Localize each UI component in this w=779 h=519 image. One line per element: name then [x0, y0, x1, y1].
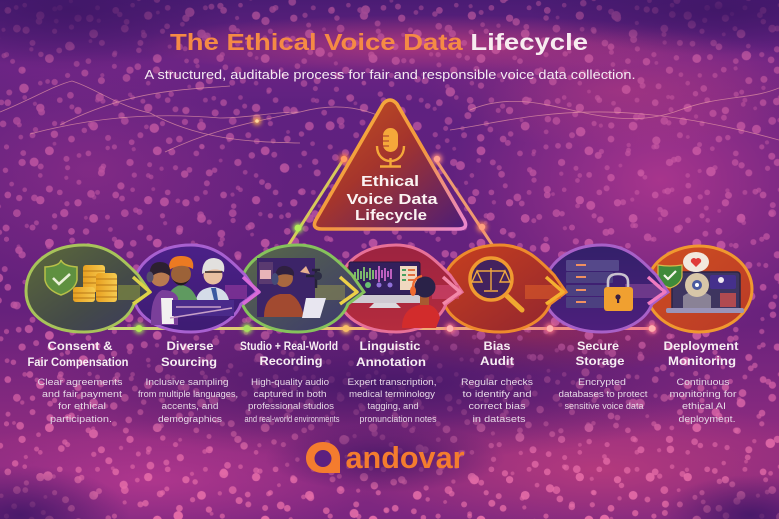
label: secure storage: databases to protect — [558, 389, 648, 399]
stage 2: diverse sourcing — [133, 245, 259, 332]
label: deployment monitoring: monitoring for — [670, 389, 736, 399]
label: secure storage: Secure — [577, 339, 619, 353]
label: studio and real-world recording: professional studios — [248, 401, 335, 411]
triangle label: Voice Data — [346, 191, 438, 208]
connector lines from triangle to stages — [288, 154, 493, 246]
timeline with nodes — [108, 324, 657, 334]
label: secure storage — [558, 339, 648, 411]
label: studio and real-world recording: Studio + Real-World — [240, 339, 338, 353]
label: consent and fair compensation: and fair payment — [42, 389, 123, 399]
label: bias audit: in datasets — [472, 414, 526, 424]
stage 1: consent and fair compensation — [26, 245, 150, 332]
stage 4: linguistic annotation — [338, 245, 462, 332]
label: linguistic annotation — [348, 339, 437, 424]
central triangle badge — [314, 100, 466, 229]
label: deployment monitoring: Continuous — [676, 377, 730, 387]
stage 3: studio and real-world recording — [240, 245, 364, 332]
label: diverse sourcing: Sourcing — [161, 355, 217, 369]
icon: andovar mark — [306, 442, 340, 473]
label: diverse sourcing: demographics — [158, 414, 223, 424]
label: deployment monitoring: Deployment — [664, 339, 738, 353]
label: linguistic annotation: Expert transcription, — [348, 377, 436, 387]
icon: narrator in studio — [257, 258, 326, 318]
label: deployment monitoring — [664, 339, 738, 424]
stage 6: secure storage — [544, 245, 668, 332]
label: studio and real-world recording — [240, 339, 340, 424]
label: linguistic annotation: tagging, and — [368, 401, 418, 411]
label: secure storage: Encrypted — [578, 377, 626, 387]
icon: microphone — [377, 128, 404, 166]
triangle label: Ethical — [361, 173, 419, 190]
label: diverse sourcing — [138, 339, 238, 424]
stage 5: bias audit — [442, 245, 566, 332]
icon: laptop with monitoring — [658, 252, 744, 313]
label: bias audit — [461, 339, 534, 424]
label: diverse sourcing: accents, and — [162, 401, 218, 411]
triangle label: Lifecycle — [355, 207, 427, 224]
label: studio and real-world recording: Recording — [260, 354, 322, 368]
label: bias audit: Regular checks — [461, 377, 534, 387]
label: consent and fair compensation: Fair Compensation — [28, 355, 128, 369]
arrow tip — [648, 277, 665, 304]
label: studio and real-world recording: captured in both — [254, 389, 326, 399]
label: deployment monitoring: Monitoring — [668, 354, 736, 368]
arrow tip — [243, 277, 259, 304]
label: diverse sourcing: Diverse — [166, 339, 214, 353]
label: consent and fair compensation: participation. — [50, 414, 112, 424]
arrow tip — [546, 277, 563, 304]
icon: scales in magnifier — [470, 258, 522, 310]
icon: shield with check — [45, 260, 77, 295]
label: bias audit: to identify and — [462, 389, 532, 399]
arrow tip — [443, 277, 460, 304]
icon: monitor and annotator — [349, 262, 440, 328]
label: consent and fair compensation: Consent & — [48, 339, 113, 353]
triangle label — [346, 173, 438, 224]
label: consent and fair compensation: for ethical — [58, 401, 106, 411]
label: deployment monitoring: ethical AI — [682, 401, 726, 411]
arrow tip — [340, 277, 357, 304]
subtitle: A structured, auditable process for fair and responsible voice data collection. — [144, 68, 636, 82]
label: deployment monitoring: deployment. — [678, 414, 736, 424]
icon: coin stacks — [73, 265, 117, 302]
label: linguistic annotation: Linguistic — [360, 339, 421, 353]
label: secure storage: sensitive voice data — [564, 401, 644, 411]
label: linguistic annotation: medical terminology — [349, 389, 436, 399]
label: studio and real-world recording: High-quality audio — [251, 377, 329, 387]
label: diverse sourcing: from multiple languages, — [138, 389, 238, 399]
title: The Ethical Voice Data Lifecycle — [170, 29, 588, 55]
label: bias audit: correct bias — [468, 401, 526, 411]
label: bias audit: Audit — [480, 354, 514, 368]
label: consent and fair compensation: Clear agreements — [38, 377, 123, 387]
label: secure storage: Storage — [576, 354, 625, 368]
label: linguistic annotation: Annotation — [356, 355, 426, 369]
icon: three diverse speakers — [146, 256, 234, 325]
arrow tip — [133, 277, 150, 304]
logo: andovar: andovar — [346, 440, 464, 475]
label: studio and real-world recording: and real-world environments — [244, 414, 340, 424]
label: consent and fair compensation — [28, 339, 128, 424]
label: diverse sourcing: Inclusive sampling — [146, 377, 228, 387]
label: linguistic annotation: pronunciation notes — [360, 414, 437, 424]
icon: servers and padlock — [566, 260, 633, 311]
stage 7: deployment monitoring — [646, 246, 752, 332]
label: bias audit: Bias — [484, 339, 511, 353]
